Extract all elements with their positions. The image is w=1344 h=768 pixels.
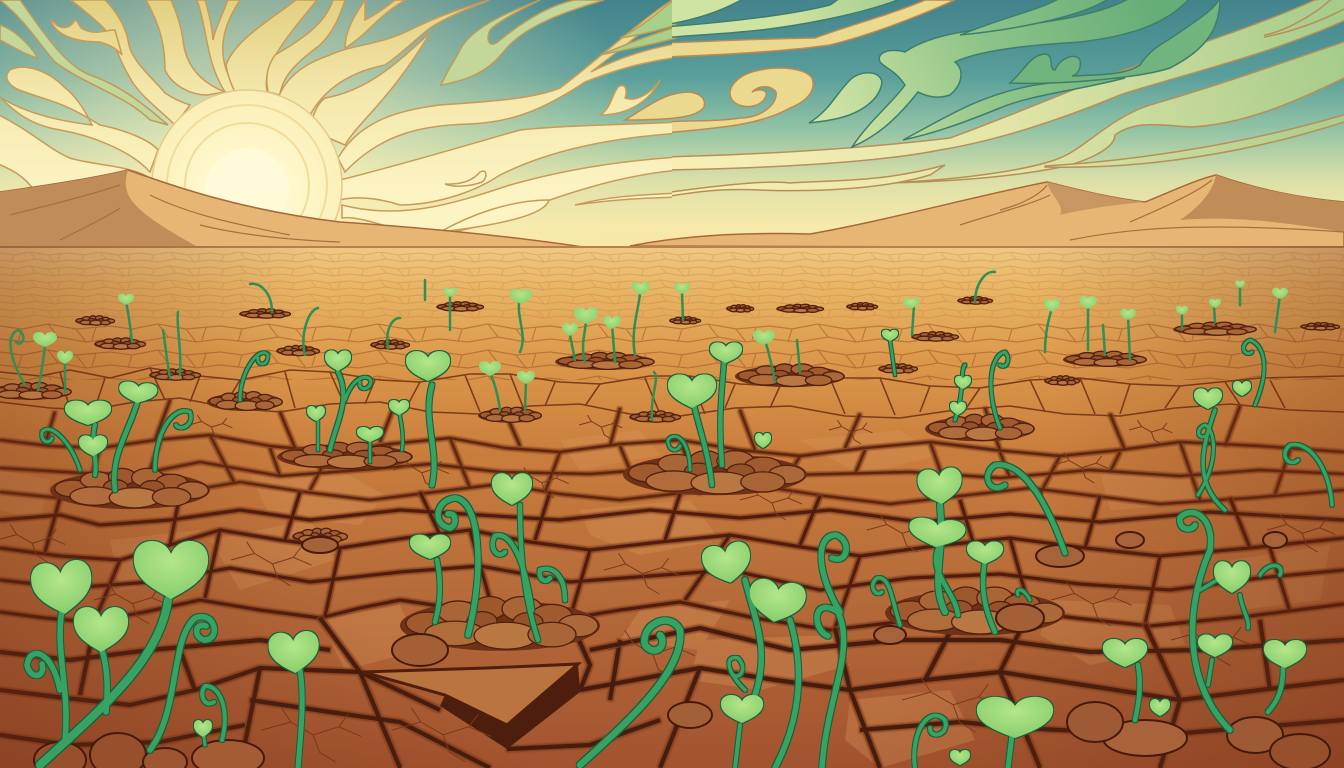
broken raised slab with dark side [363, 664, 580, 749]
horizon line [0, 246, 1344, 248]
sun glow [0, 0, 900, 250]
far ground fine cracks [0, 252, 1344, 322]
crack network foreground [0, 610, 1344, 768]
mid-distance seedlings left [42, 342, 771, 490]
crack network middle [0, 400, 1344, 504]
sun with concentric rings [152, 90, 342, 280]
mid-distance seedlings right [882, 330, 1332, 510]
foreground seedlings left [27, 541, 321, 768]
green leafy ribbons [664, 0, 1220, 147]
raised lighter plates [0, 430, 1330, 768]
far mountains left [0, 170, 590, 248]
ground edge shading [0, 246, 1344, 768]
right seedling cluster [873, 465, 1306, 730]
crack network far [0, 368, 1344, 418]
sky background [0, 0, 1344, 250]
foreground seedlings centre [580, 535, 1053, 768]
cream swirl and gold top ribbons [664, 0, 955, 133]
small distant seedlings [11, 272, 1288, 420]
fine hairline cracks in plates [0, 415, 1335, 762]
near-far ground fine cracks [0, 320, 1344, 380]
small swirl left of the big swirl [625, 92, 704, 120]
large foreground rocks [34, 532, 1330, 768]
rock mounds around seedlings [0, 297, 1340, 651]
pale gold and green bands sweeping right [664, 0, 1344, 197]
cream flame rays around the sun [0, 0, 680, 238]
far mountains right [630, 175, 1344, 248]
crack network near [0, 492, 1344, 630]
cracked earth ground [0, 246, 1344, 768]
top-left green-tinted ribbon [0, 0, 676, 125]
middle-left seedling cluster [410, 473, 565, 640]
